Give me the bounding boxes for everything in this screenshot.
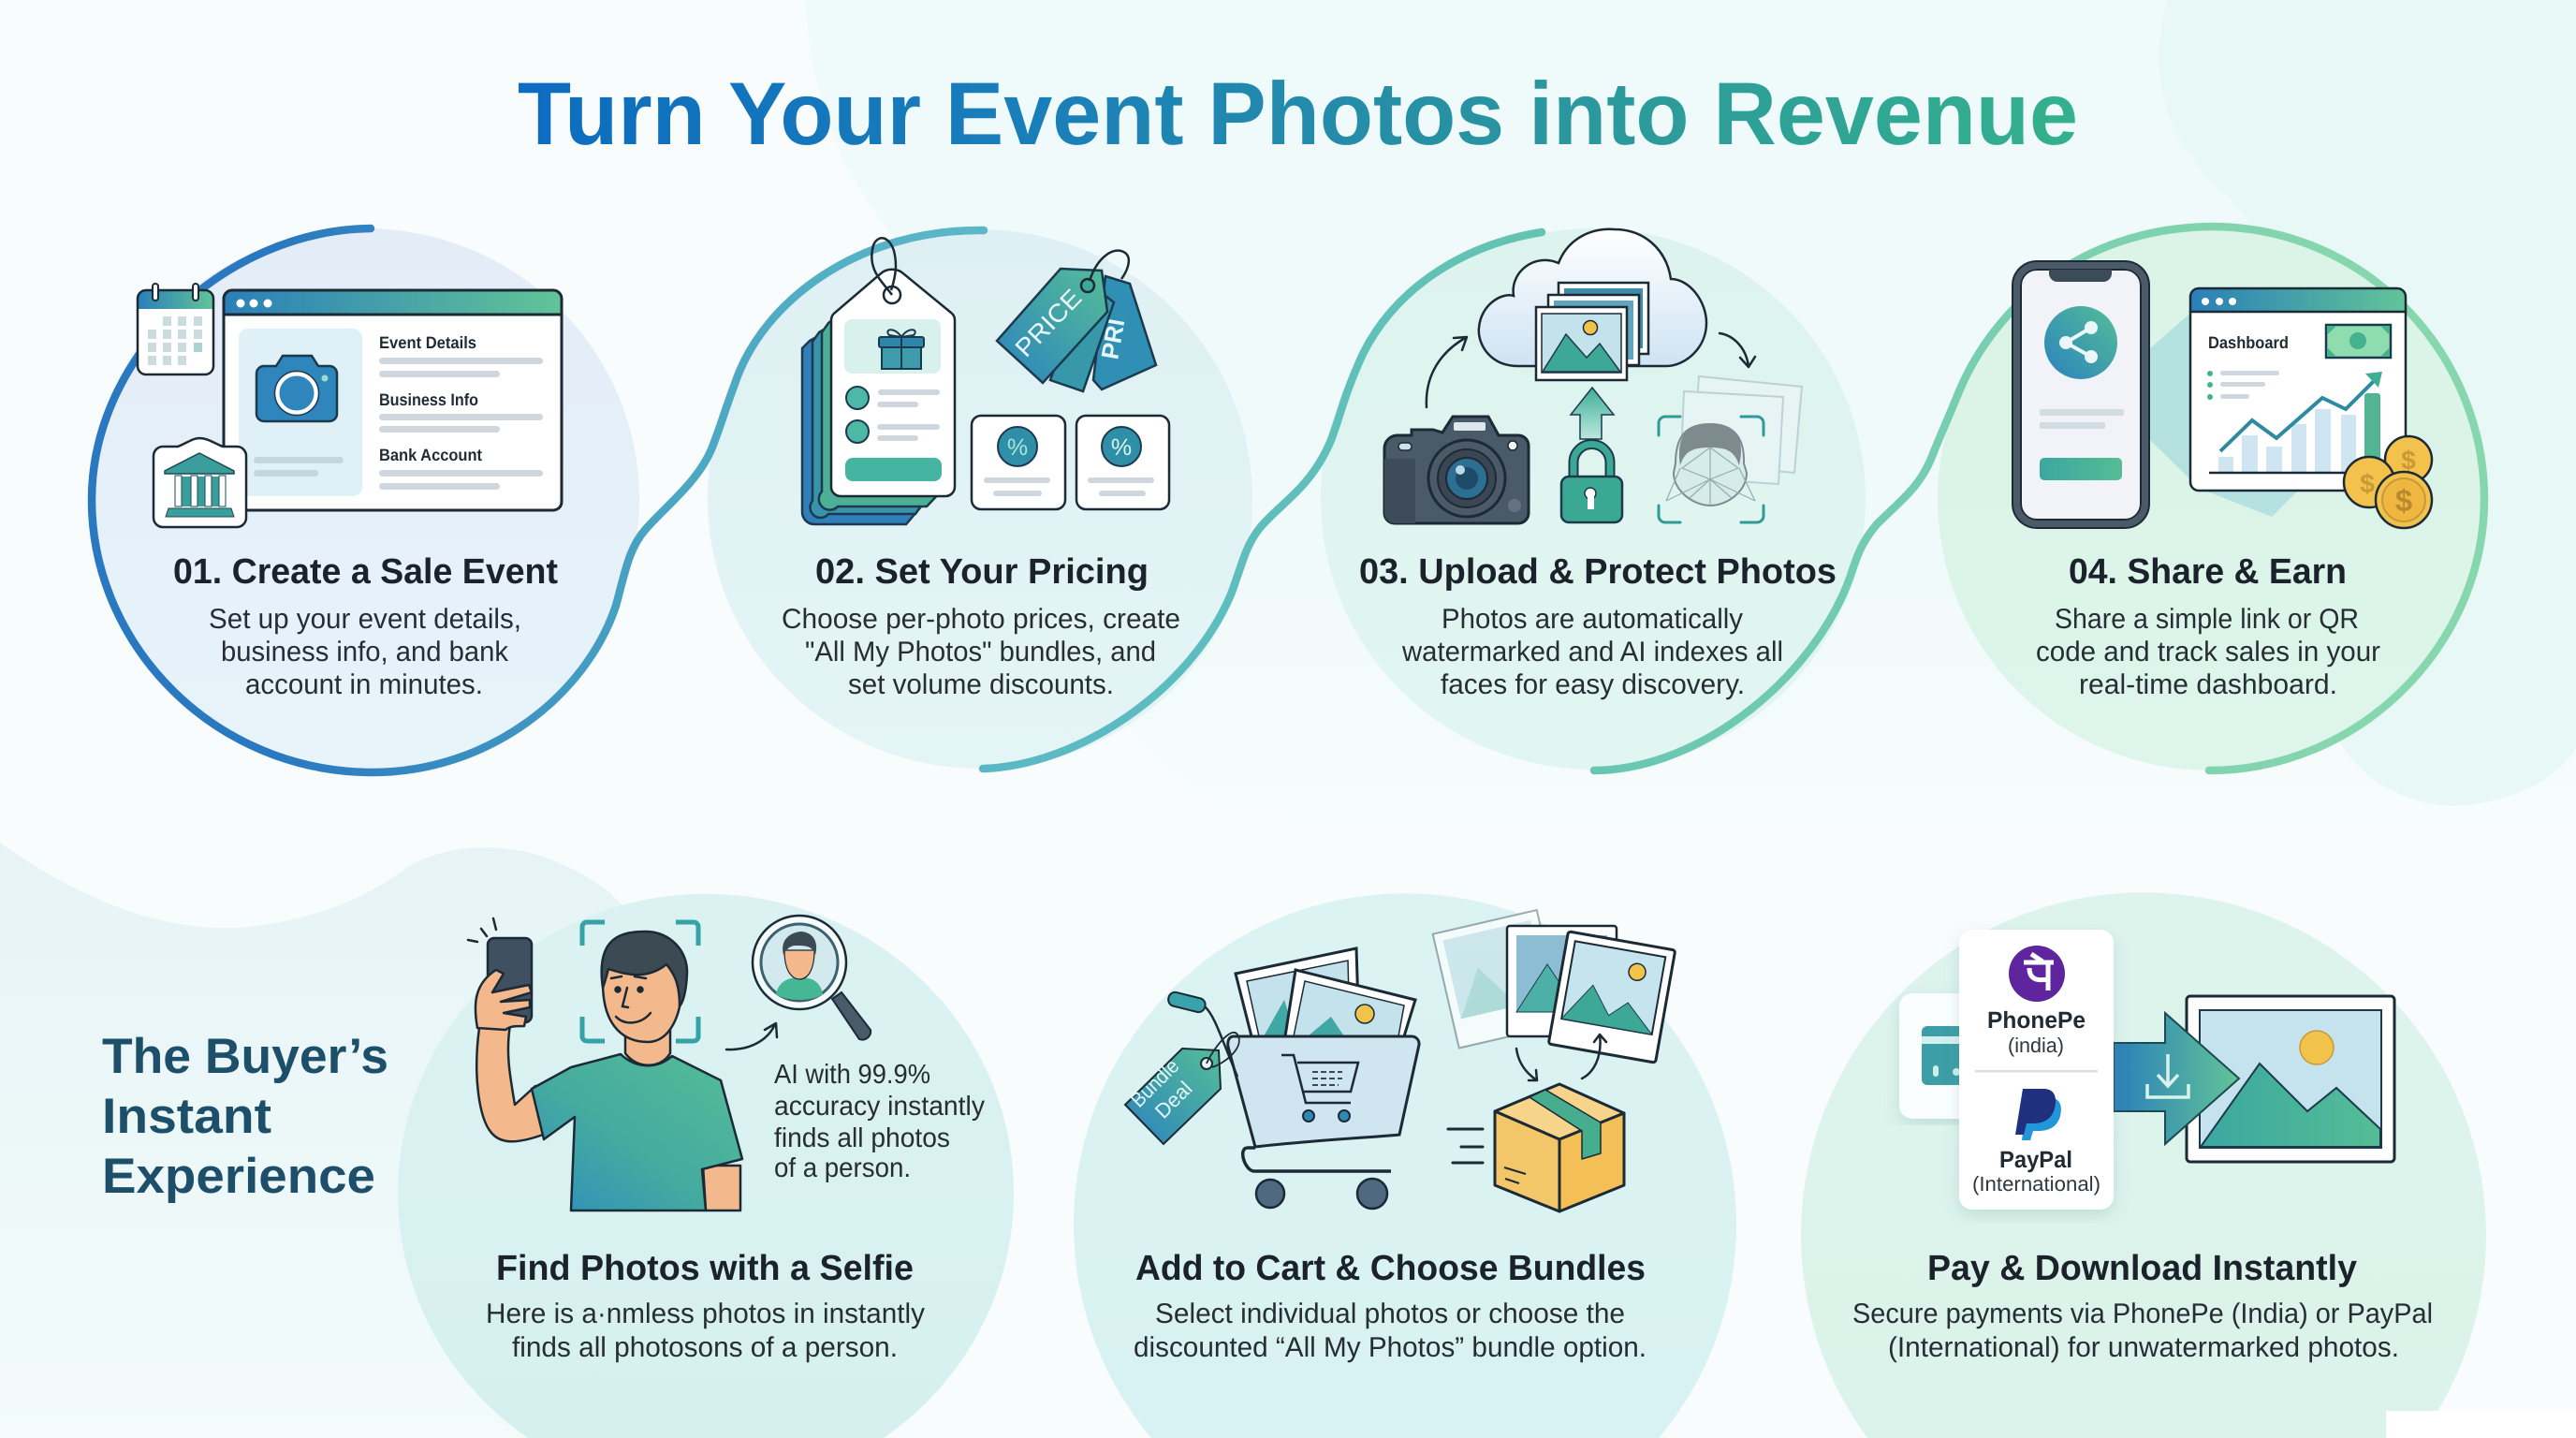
text: step 02: set volume discounts. — [848, 669, 1114, 700]
icon: smartphone with share — [2012, 261, 2149, 528]
text: step 02: Choose per-photo prices, create — [782, 604, 1180, 635]
text: pay and download: Secure payments via PhonePe (India) or PayPal — [1852, 1299, 2433, 1329]
panel: step 03 illustration — [1384, 229, 1802, 523]
callout: AI accuracy: of a person. — [774, 1153, 911, 1183]
panel behind dashboard — [2150, 309, 2378, 517]
text: step 01: account in minutes. — [245, 669, 483, 700]
card: payment methods: PhonePe — [1987, 1007, 2086, 1034]
text: step 03: faces for easy discovery. — [1441, 669, 1745, 700]
text: step 04: code and track sales in your — [2036, 637, 2380, 668]
icon: bank — [154, 438, 246, 527]
price tags: PRI — [1095, 316, 1130, 361]
panel: step 04 illustration — [2012, 261, 2432, 528]
card: payment methods — [1959, 930, 2114, 1210]
text: find photos with a selfie — [486, 1249, 925, 1363]
text: add to cart: Add to Cart & Choose Bundles — [1135, 1249, 1646, 1288]
text: step 03 — [1359, 552, 1837, 700]
white corner patch — [2386, 1411, 2576, 1438]
photo frame — [2187, 996, 2394, 1162]
discount cards: % — [1111, 434, 1132, 461]
browser form window: Event Details — [379, 333, 476, 352]
text: find photos with a selfie: finds all photosons of a person. — [512, 1332, 898, 1363]
browser form window — [224, 290, 562, 510]
background circles for the buyer steps — [398, 892, 2486, 1438]
text: step 04 — [2036, 552, 2380, 700]
icon: gold coins: $ — [2395, 483, 2412, 518]
tag: bundle deal — [1125, 1033, 1239, 1144]
logo: PhonePe — [2009, 946, 2065, 1002]
tag: bundle deal: Deal — [1150, 1077, 1197, 1123]
dashboard window: Dashboard — [2208, 333, 2289, 352]
arrow: selfie to search — [726, 1023, 777, 1049]
icon: gold coins: $ — [2360, 469, 2375, 498]
panel: payment illustration — [1899, 930, 2394, 1210]
text: step 01: Set up your event details, — [209, 604, 521, 635]
text: add to cart: Select individual photos or choose the — [1155, 1299, 1625, 1329]
card: payment methods: (india) — [2008, 1034, 2064, 1057]
icon: magnifier with portrait — [753, 916, 871, 1040]
icon: padlock — [1561, 444, 1622, 522]
heading: buyer experience — [102, 1029, 388, 1204]
text: add to cart — [1134, 1249, 1647, 1363]
text: step 04: real-time dashboard. — [2079, 669, 2337, 700]
card: payment methods: (International) — [1972, 1172, 2100, 1196]
tag: bundle deal: Bundle — [1126, 1054, 1183, 1112]
text: step 01: business info, and bank — [221, 637, 509, 668]
text: find photos with a selfie: Find Photos with a Selfie — [496, 1249, 914, 1288]
icon: shopping cart — [1167, 990, 1419, 1209]
callout: AI accuracy: finds all photos — [774, 1123, 950, 1153]
person taking a selfie — [476, 932, 742, 1211]
arrow: upload — [1571, 388, 1614, 439]
heading: buyer experience: The Buyer’s — [102, 1029, 388, 1084]
discount cards — [972, 416, 1169, 509]
price tags — [997, 251, 1156, 391]
callout: AI accuracy: AI with 99.9% — [774, 1060, 930, 1090]
icon: parcel box — [1495, 1084, 1624, 1211]
arrow: cloud to indexed photos — [1720, 333, 1755, 367]
panel: cart illustration — [1125, 910, 1676, 1211]
icon: camera — [256, 356, 337, 421]
price tags: PRICE — [1010, 284, 1087, 362]
text: step 02: "All My Photos" bundles, and — [805, 637, 1156, 668]
browser form window: Business Info — [379, 390, 478, 409]
arrow: camera to cloud — [1427, 337, 1467, 407]
dashboard window — [2190, 288, 2406, 491]
photo prints — [1433, 910, 1676, 1063]
arrow: download — [2114, 1013, 2239, 1144]
title: Turn Your Event Photos into Revenue — [518, 65, 2078, 164]
heading: buyer experience: Experience — [102, 1149, 375, 1204]
icon: cloud with photos — [1479, 229, 1706, 380]
connector arcs linking steps 01 to 04 — [92, 227, 2484, 772]
icon: face recognition — [1659, 376, 1802, 522]
selfie sparks — [468, 918, 496, 942]
face scan frame — [582, 922, 698, 1041]
text: step 03: Photos are automatically — [1442, 604, 1743, 635]
panel: selfie illustration — [468, 916, 985, 1211]
discount cards: % — [1007, 434, 1028, 461]
text: step 01 — [173, 552, 558, 700]
heading: buyer experience: Instant — [102, 1089, 271, 1144]
text: step 03: 03. Upload & Protect Photos — [1359, 552, 1837, 592]
text: find photos with a selfie: Here is a·nmless photos in instantly — [486, 1299, 925, 1329]
text: step 02: 02. Set Your Pricing — [815, 552, 1149, 592]
icon: gold coins — [2344, 436, 2432, 528]
icon: gold coins: $ — [2401, 446, 2416, 475]
callout: AI accuracy — [774, 1060, 985, 1183]
text: step 01: 01. Create a Sale Event — [173, 552, 558, 592]
speed lines — [1448, 1129, 1483, 1163]
text: step 04: 04. Share & Earn — [2069, 552, 2347, 592]
background circles for the seller steps — [91, 227, 2484, 771]
card: credit card behind — [1899, 993, 1983, 1119]
callout: AI accuracy: accuracy instantly — [774, 1092, 985, 1122]
icon: DSLR camera — [1384, 417, 1529, 523]
text: step 02 — [782, 552, 1180, 700]
text: step 03: watermarked and AI indexes all — [1401, 637, 1783, 668]
card: payment methods: PayPal — [1999, 1147, 2072, 1173]
text: step 04: Share a simple link or QR — [2055, 604, 2359, 635]
logo: PayPal — [2015, 1089, 2061, 1140]
panel: step 01 illustration — [138, 284, 562, 527]
text: add to cart: discounted “All My Photos” bundle option. — [1134, 1332, 1647, 1363]
stacked bundle tags — [802, 238, 955, 524]
icon: calendar — [138, 284, 213, 374]
text: pay and download — [1852, 1249, 2433, 1363]
browser form window: Bank Account — [379, 446, 482, 464]
text: pay and download: Pay & Download Instantly — [1927, 1249, 2357, 1288]
panel: step 02 illustration — [802, 238, 1169, 524]
arrows: photos and box — [1516, 1034, 1606, 1080]
photos in cart — [1236, 948, 1415, 1036]
text: pay and download: (International) for unwatermarked photos. — [1888, 1332, 2399, 1363]
face details — [611, 976, 651, 1022]
